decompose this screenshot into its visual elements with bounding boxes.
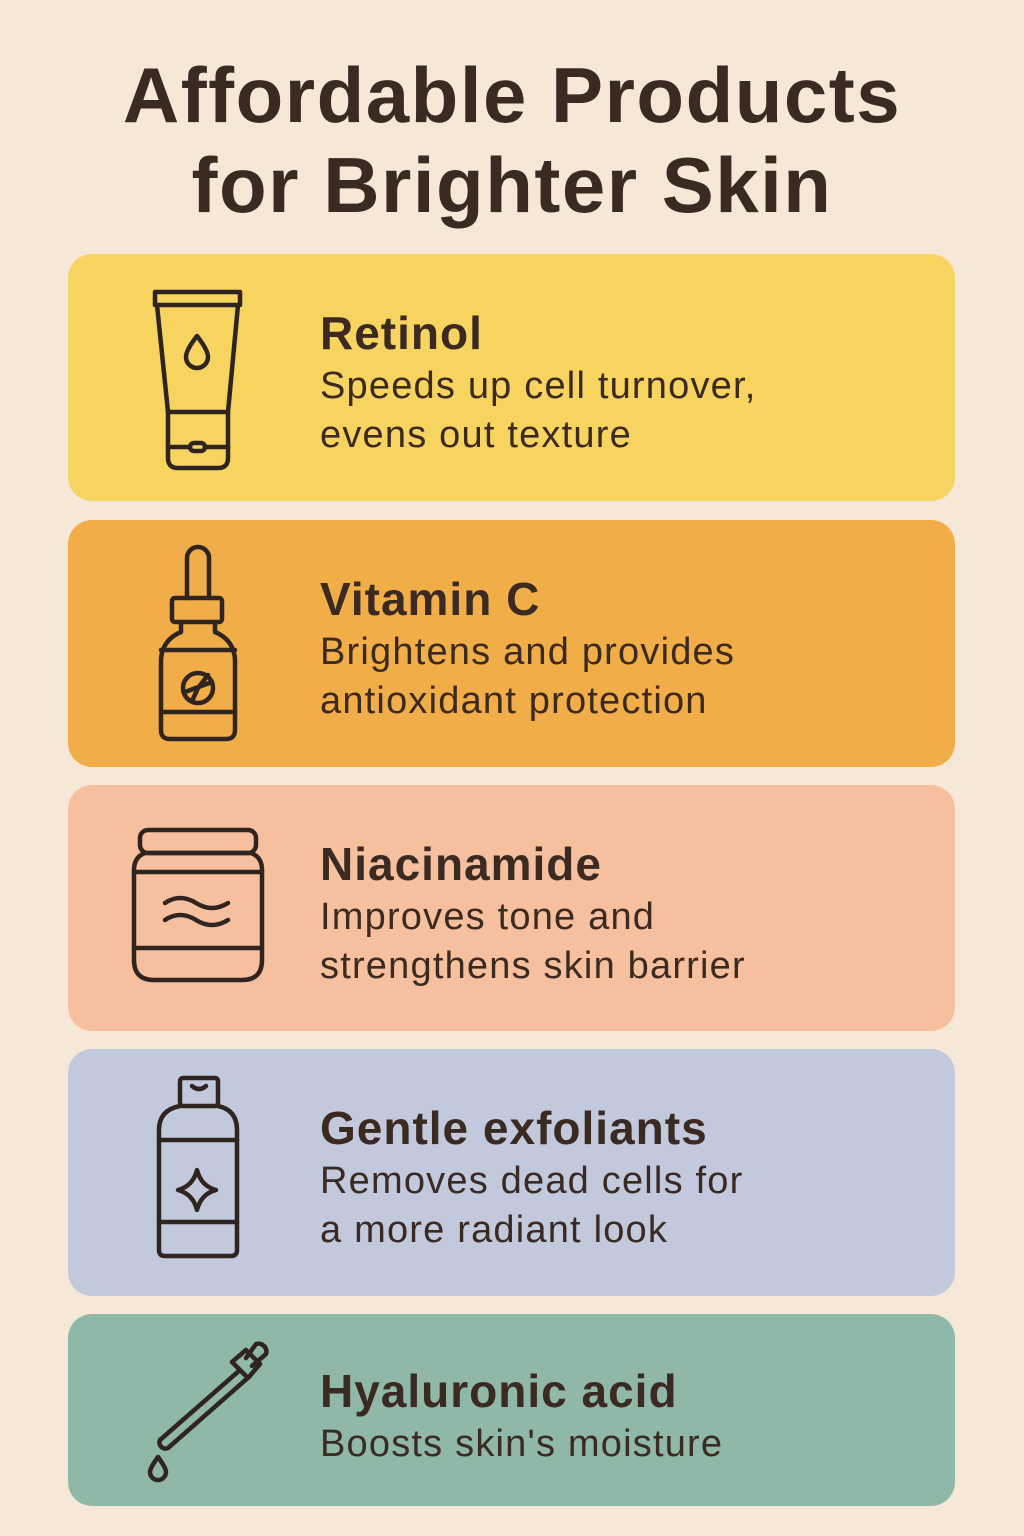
text: hyaluronic acid: Boosts skin's moisture — [320, 1423, 723, 1465]
panel: gentle exfoliants — [68, 1049, 955, 1296]
text: retinol: evens out texture — [320, 414, 632, 456]
heading: gentle exfoliants: Gentle exfoliants — [320, 1102, 708, 1154]
icon: dropper bottle — [158, 544, 238, 742]
text: vitamin c: antioxidant protection — [320, 680, 708, 722]
text: niacinamide: strengthens skin barrier — [320, 945, 746, 987]
text: vitamin c: Brightens and provides — [320, 631, 735, 673]
text: niacinamide — [320, 896, 746, 987]
text: gentle exfoliants: a more radiant look — [320, 1209, 668, 1251]
text: gentle exfoliants: Removes dead cells for — [320, 1160, 743, 1202]
icon: pipette — [148, 1341, 269, 1482]
icon: jar — [132, 828, 264, 982]
title: for Brighter Skin — [192, 141, 832, 229]
heading: vitamin c: Vitamin C — [320, 573, 540, 625]
icon: tube — [152, 290, 242, 470]
heading: retinol: Retinol — [320, 307, 483, 359]
panel: niacinamide — [68, 785, 955, 1031]
heading: hyaluronic acid: Hyaluronic acid — [320, 1365, 678, 1417]
heading: niacinamide: Niacinamide — [320, 838, 602, 890]
title: Affordable Products — [123, 51, 901, 139]
panel: retinol — [68, 254, 955, 501]
panel: hyaluronic acid — [68, 1314, 955, 1506]
icon: bottle — [156, 1076, 240, 1258]
text: gentle exfoliants — [320, 1160, 743, 1251]
text: retinol — [320, 365, 757, 456]
panel: vitamin c — [68, 520, 955, 767]
text: vitamin c — [320, 631, 735, 722]
text: niacinamide: Improves tone and — [320, 896, 655, 938]
text: retinol: Speeds up cell turnover, — [320, 365, 757, 407]
title — [123, 51, 901, 229]
